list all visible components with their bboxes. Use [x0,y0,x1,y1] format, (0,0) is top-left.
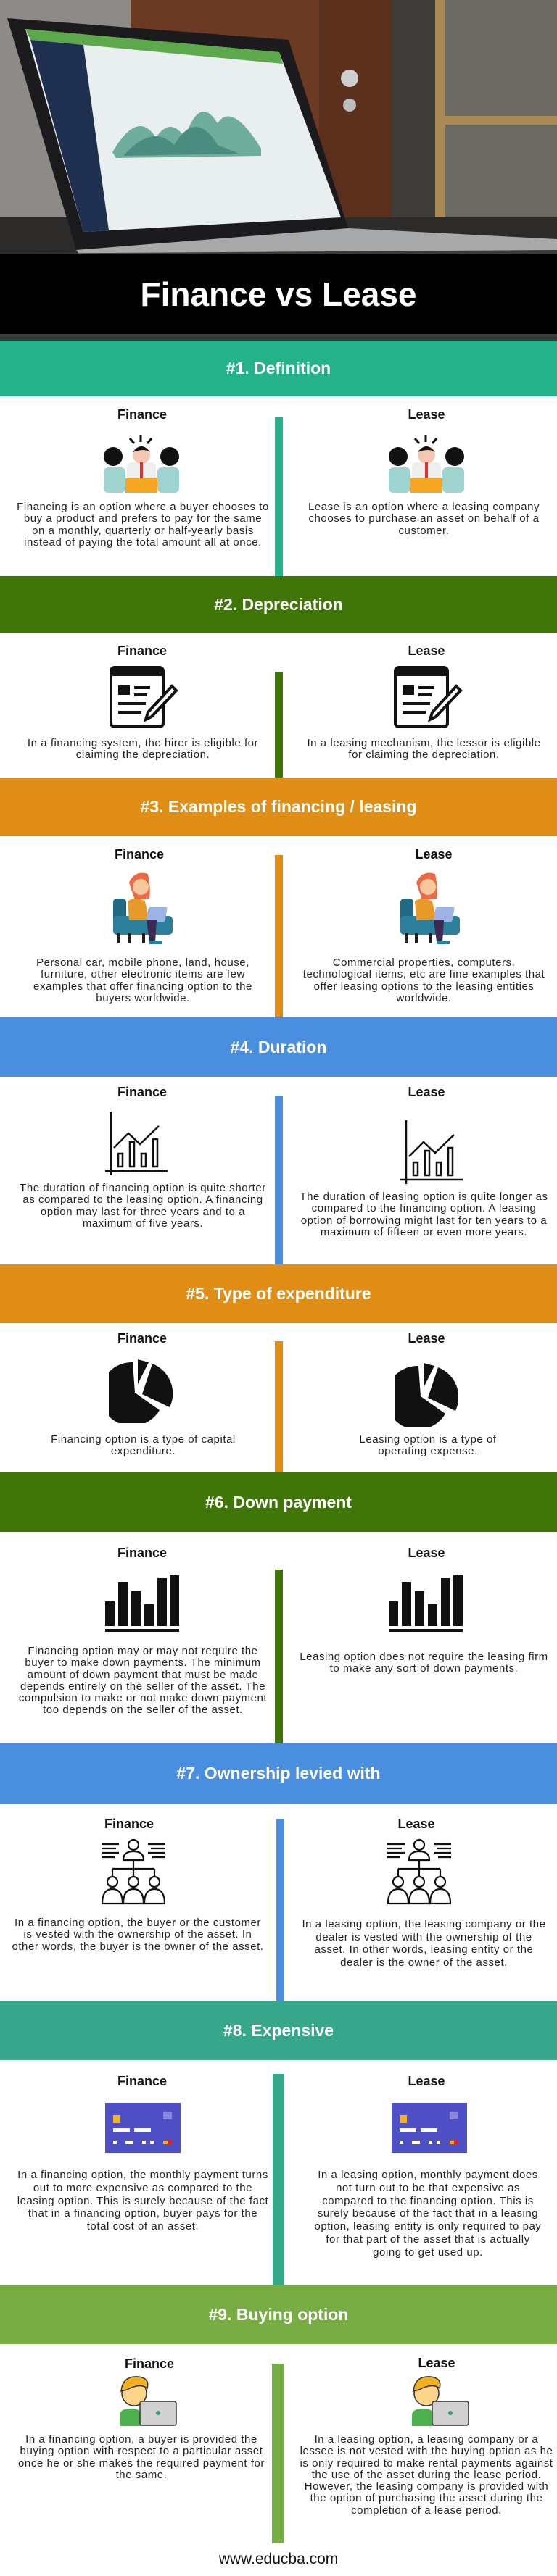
section 5 header [0,1264,557,1323]
s1 lease icon: meeting [389,435,464,493]
s9 lease label: Lease [418,2356,455,2370]
section 9 header: #9. Buying option [209,2304,348,2323]
s2 finance label: Finance [117,643,167,658]
section 9 header [0,2285,557,2344]
s3 lease text: Commercial properties, computers, technological items, etc are fine examples that offer leasing options to the leasing entities worldwide. [303,956,545,1004]
s8 finance icon: credit card [105,2103,181,2153]
s4 finance icon: growth chart [105,1112,168,1175]
s6 finance label: Finance [117,1546,167,1560]
section 3 panel [33,847,545,1017]
section 5 panel [51,1331,497,1472]
s7 lease icon: org chart [387,1839,451,1904]
hero photo: laptop on desk [0,0,557,341]
s8 finance text: In a financing option, the monthly payment turns out to more expensive as compared to the leasing option. This is surely because of the fact that in a financing option, buyer pays for the total cost of an asset. [17,2169,268,2233]
s6 lease label: Lease [408,1546,445,1560]
s3 finance icon: woman in chair [113,872,173,944]
title banner: Finance vs Lease [141,275,416,313]
s1 lease label: Lease [408,407,445,422]
section 7 panel [12,1817,546,2001]
section 6 header: #6. Down payment [205,1493,352,1512]
s7 finance icon: org chart [102,1839,165,1904]
section 8 header [0,2001,557,2060]
s7 lease label: Lease [397,1817,435,1831]
s6 finance icon: bar chart [105,1575,179,1632]
s9 finance text: In a financing option, a buyer is provided the buying option with respect to a particular asset once he or she makes the required payment for the same. [18,2433,265,2481]
s8 lease label: Lease [408,2074,445,2088]
section 8 header: #8. Expensive [223,2020,334,2039]
s1 lease text: Lease is an option where a leasing company chooses to purchase an asset on behalf of a customer. [308,501,540,537]
s9 finance icon: man with laptop [120,2376,177,2426]
s5 lease text: Leasing option is a type of operating expense. [359,1433,497,1457]
s2 lease text: In a leasing mechanism, the lessor is eligible for claiming the depreciation. [307,737,541,761]
s1 finance icon: meeting [104,435,179,493]
s8 lease text: In a leasing option, monthly payment does not turn out to be that expensive as compared to the financing option. This is surely because of the fact that in a leasing option, leasing entity is only required to pay for that part of the asset that is actually going to get used up. [315,2169,541,2259]
s4 lease label: Lease [408,1085,445,1099]
s5 lease label: Lease [408,1331,445,1346]
section 4 header [0,1017,557,1077]
s7 finance text: In a financing option, the buyer or the customer is vested with the ownership of the asset. In other words, the buyer is the owner of the asset. [12,1917,264,1953]
s4 finance label: Finance [117,1085,167,1099]
s9 finance label: Finance [125,2356,174,2371]
s5 finance label: Finance [117,1331,167,1346]
s3 finance text: Personal car, mobile phone, land, house, furniture, other electronic items are few examples that offer financing option to the buyers worldwide. [33,956,252,1004]
section 8 panel [17,2074,541,2285]
section 7 header: #7. Ownership levied with [176,1764,381,1783]
s1 finance label: Finance [117,407,167,422]
s7 finance label: Finance [104,1817,154,1831]
section 1 header: #1. Definition [226,359,331,378]
s5 finance text: Financing option is a type of capital expenditure. [51,1433,236,1457]
section 9 panel [18,2356,553,2567]
s7 lease text: In a leasing option, the leasing company or the dealer is vested with the ownership of the asset. In other words, leasing entity or the dealer is the owner of the asset. [302,1918,546,1969]
section 5 header: #5. Type of expenditure [186,1284,371,1303]
s2 finance icon: document with pen [110,666,178,728]
section 6 panel [19,1546,548,1743]
section 6 header [0,1472,557,1532]
footer: website: www.educba.com [219,2551,338,2567]
section 1 header [0,341,557,396]
s4 lease text: The duration of leasing option is quite longer as compared to the financing option. A leasing option of borrowing might last for ten years to a maximum of fifteen or even more years. [300,1191,548,1238]
s6 lease text: Leasing option does not require the leasing firm to make any sort of down payments. [300,1651,548,1675]
s9 lease icon: man with laptop [412,2376,469,2426]
s2 finance text: In a financing system, the hirer is eligible for claiming the depreciation. [28,737,258,761]
s4 lease icon: growth chart [400,1120,463,1184]
s6 lease icon: bar chart [389,1575,463,1632]
section 4 header: #4. Duration [231,1038,326,1056]
section 4 panel [20,1085,548,1264]
s9 lease text: In a leasing option, a leasing company or a lessee is not vested with the buying option as he is only required to make rental payments against the use of the asset during the lease period. However, the leasing company is provided with the option of purchasing the asset during the completion of a lease period. [300,2433,553,2517]
s4 finance text: The duration of financing option is quite shorter as compared to the leasing option. A financing option may last for three years and to a maximum of five years. [20,1182,266,1230]
s6 finance text: Financing option may or may not require the buyer to make down payments. The minimum amount of down payment that must be made depends entirely on the seller of the asset. The compulsion to make or not make down payment too depends on the seller of the asset. [19,1645,267,1716]
section 2 panel [28,643,541,778]
section 1 panel [17,407,540,576]
s5 lease icon: pie chart [395,1363,458,1427]
section 7 header [0,1743,557,1804]
s3 finance label: Finance [115,847,164,862]
s8 finance label: Finance [117,2074,167,2088]
section 2 header: #2. Depreciation [214,594,343,613]
s3 lease label: Lease [415,847,453,862]
title banner [0,254,557,334]
section 2 header [0,576,557,633]
section 3 header [0,778,557,836]
s2 lease label: Lease [408,643,445,658]
s8 lease icon: credit card [392,2103,467,2153]
s3 lease icon: woman in chair [400,872,460,944]
s5 finance icon: pie chart [109,1359,173,1423]
section 3 header: #3. Examples of financing / leasing [141,797,416,816]
s1 finance text: Financing is an option where a buyer chooses to buy a product and prefers to pay for the same on a monthly, quarterly or half-yearly basis instead of paying the total amount all at once. [17,501,269,549]
s2 lease icon: document with pen [394,666,463,728]
